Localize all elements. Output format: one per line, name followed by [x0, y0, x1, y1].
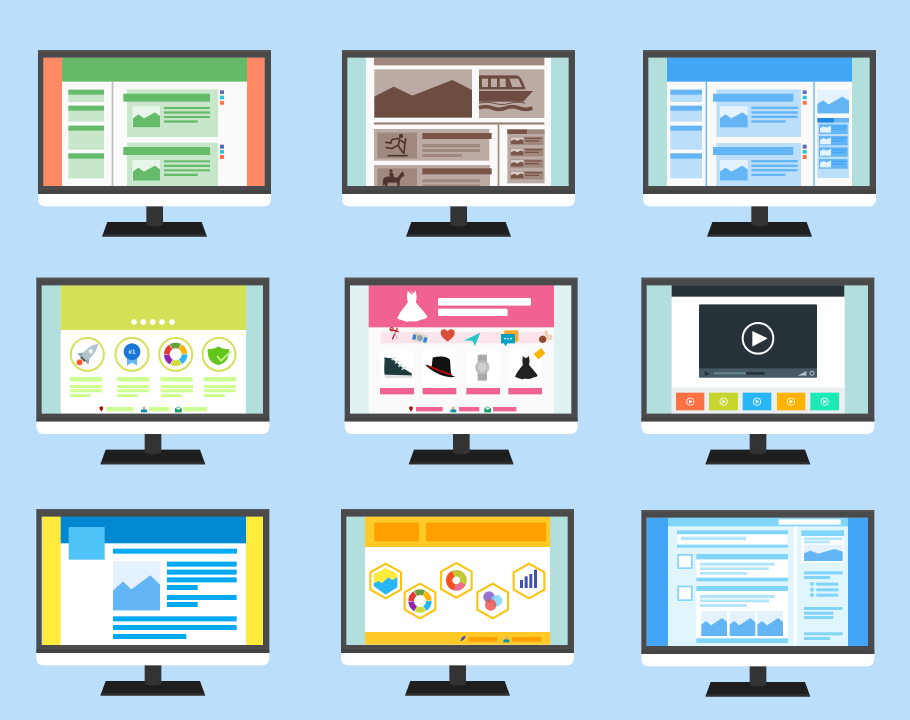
boat image — [479, 69, 544, 118]
badge: colour wheel — [159, 338, 192, 371]
sidebar cards — [68, 90, 104, 178]
monitor: yellow profile page — [36, 509, 269, 696]
right sidebar — [817, 90, 849, 178]
monitor: blue three-column layout — [643, 50, 876, 237]
post 2 with images — [677, 586, 788, 643]
monitor: video player site — [641, 278, 874, 464]
search box panel — [677, 530, 788, 548]
feature text bars — [70, 377, 236, 397]
top bar with search field — [668, 518, 848, 646]
article content — [113, 549, 237, 639]
monitor: pink fashion shop — [345, 278, 578, 464]
footer bar — [365, 632, 550, 645]
product: sneaker — [380, 351, 414, 384]
contact row — [99, 406, 207, 412]
hexagon: venn diagram — [477, 584, 508, 618]
badge: number one medal — [115, 338, 148, 371]
price bars — [380, 388, 542, 394]
post 1 — [677, 554, 788, 581]
hexagon: colour wheel — [405, 584, 435, 618]
badge: number one medal: #1 — [128, 349, 136, 356]
hexagon: bar chart — [514, 564, 544, 598]
shop banner — [369, 285, 554, 327]
left sidebar cards — [670, 90, 702, 178]
article card 2 — [123, 143, 224, 186]
monitor: orange data dashboard — [341, 509, 574, 696]
header with orange boxes — [365, 517, 550, 547]
product: watch — [466, 351, 500, 384]
contact row — [409, 406, 516, 412]
product: hat — [423, 351, 456, 384]
header bar — [62, 58, 247, 82]
horse card — [374, 165, 492, 186]
mountain image — [374, 69, 472, 118]
product: dress — [508, 348, 545, 384]
monitor: brown travel layout — [342, 50, 575, 237]
hexagon: area chart — [370, 564, 401, 598]
skiing card — [374, 129, 492, 161]
article card 2 — [713, 143, 807, 186]
header bar — [667, 58, 852, 82]
video player — [699, 304, 817, 378]
category icon band — [381, 328, 552, 346]
article card 1 — [123, 89, 224, 137]
article card 1 — [713, 89, 807, 137]
hexagon: donut chart — [441, 563, 472, 598]
monitor: green blog layout — [38, 50, 271, 237]
monitor: lime landing page with badges — [36, 278, 269, 464]
badge: shield — [202, 338, 235, 371]
profile picture — [69, 527, 105, 560]
sidebar list — [804, 571, 843, 640]
badge: rocket — [71, 338, 104, 371]
video thumbnails — [672, 388, 844, 414]
right column list — [507, 129, 545, 183]
hero banner with dots — [61, 285, 246, 330]
sidebar widget with chart — [801, 530, 844, 563]
monitor: light-blue forum layout — [641, 510, 874, 697]
